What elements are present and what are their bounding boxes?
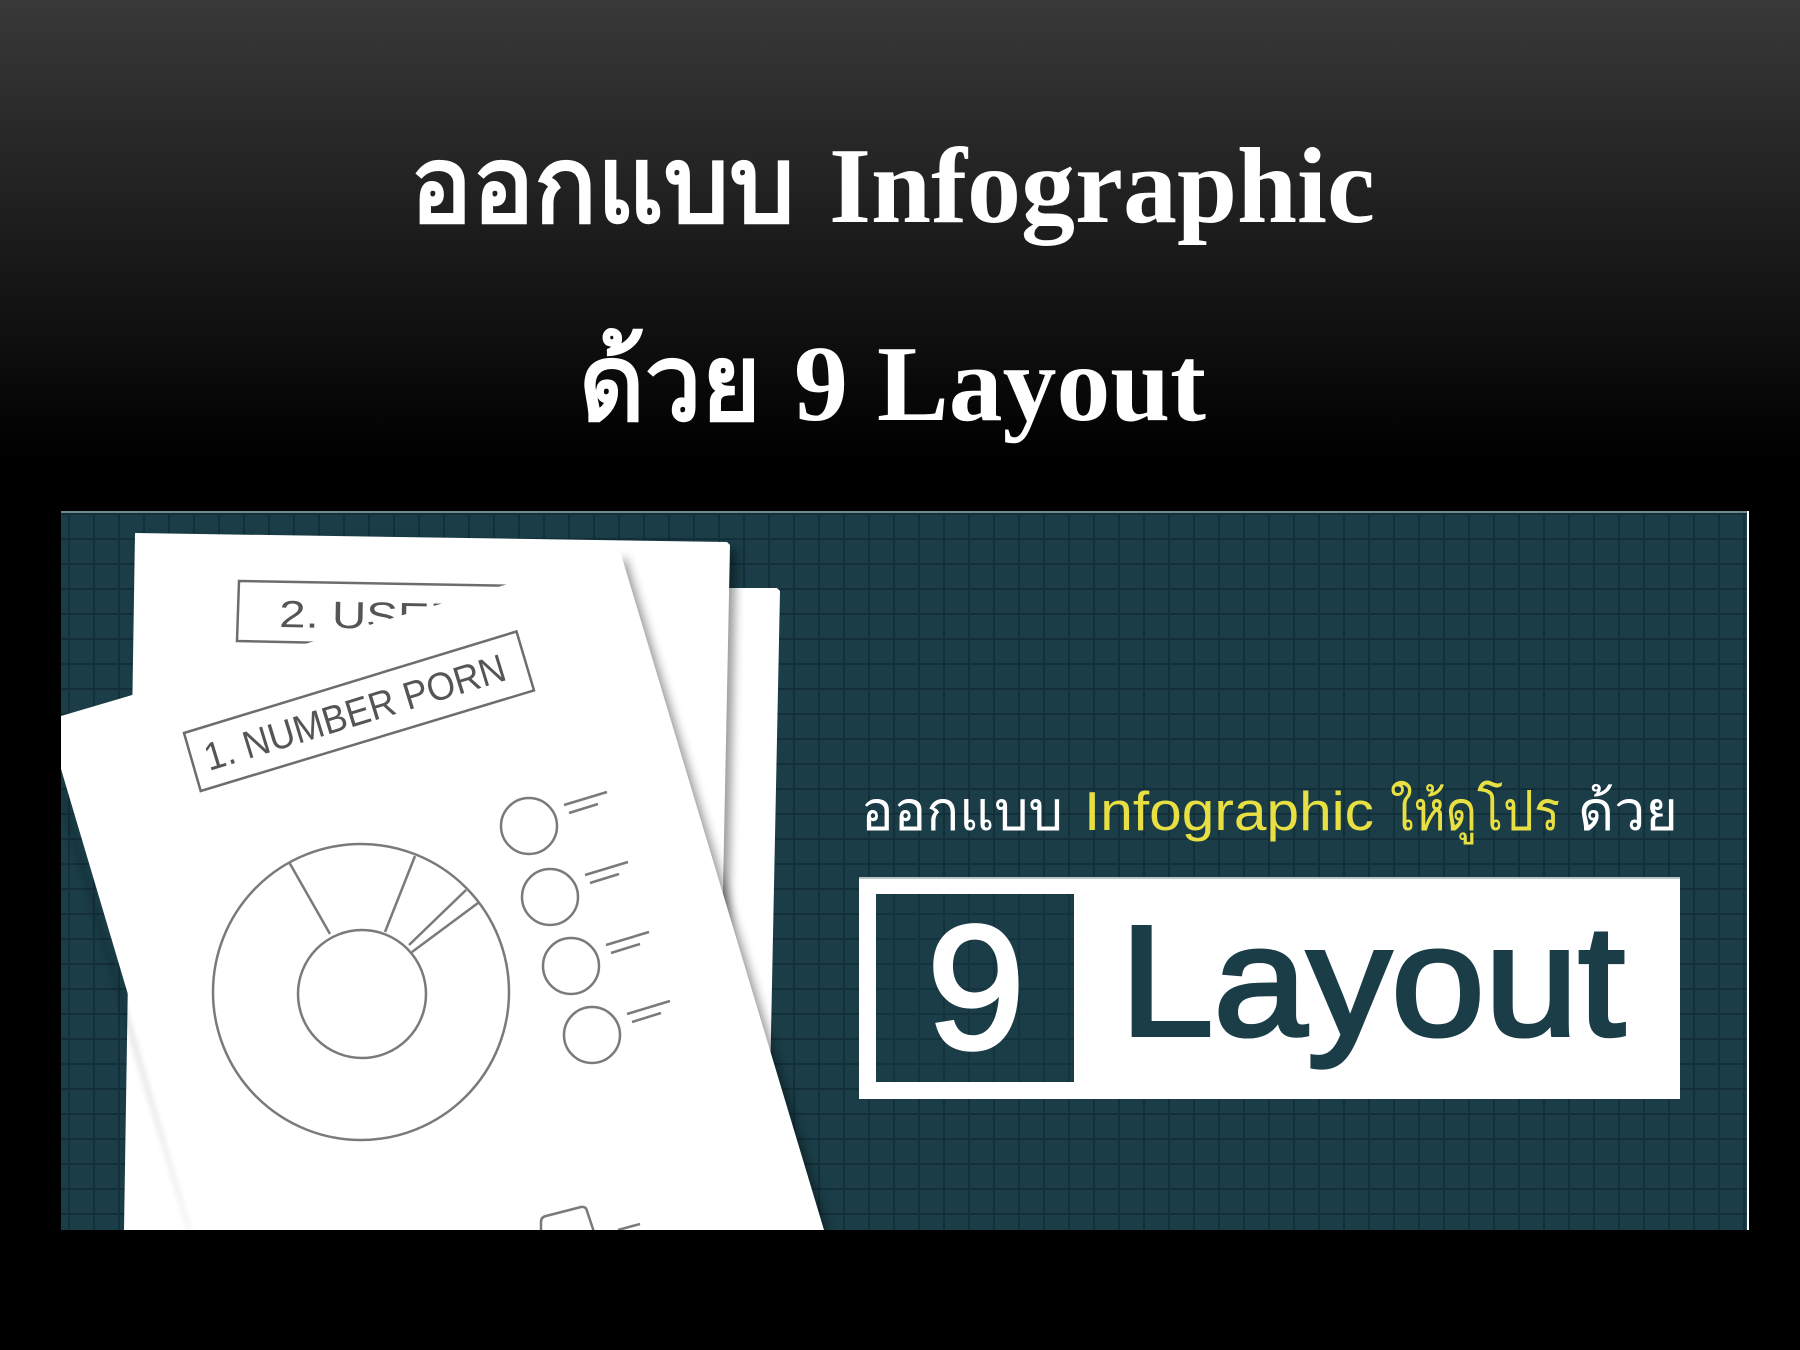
title: [410, 127, 1375, 444]
banner heading: ออกแบบ: [861, 780, 1063, 842]
number box: 9: 9: [927, 890, 1025, 1086]
banner panel: [52, 511, 1749, 1236]
label: 2. useful: [237, 581, 520, 647]
title: Infographic: [829, 127, 1375, 246]
title: ด้วย: [579, 325, 761, 444]
word: Layout: Layout: [1120, 894, 1625, 1069]
white title box: [859, 877, 1680, 1099]
donut chart: [213, 844, 509, 1140]
title: Layout: [877, 325, 1206, 444]
banner heading: Infographic: [1084, 780, 1374, 842]
title: 9: [794, 325, 848, 444]
banner heading: ให้ดูโปร: [1390, 780, 1560, 845]
label: 2. useful: 2. USEFUL: [279, 594, 520, 640]
slide background: [0, 0, 1800, 460]
number box: 9: [876, 890, 1074, 1086]
sheet of paper: 2. useful: [124, 533, 736, 1230]
title: ออกแบบ: [410, 127, 795, 246]
sheet of paper: 1. number porn: [52, 551, 829, 1236]
banner heading: [861, 780, 1678, 845]
legend circles: [501, 792, 670, 1063]
clipped bottom shape: [541, 1207, 640, 1232]
sheet of paper: back: [722, 588, 780, 1053]
label: 1. number porn: 1. NUMBER PORN: [199, 647, 511, 780]
banner heading: ด้วย: [1578, 780, 1678, 842]
